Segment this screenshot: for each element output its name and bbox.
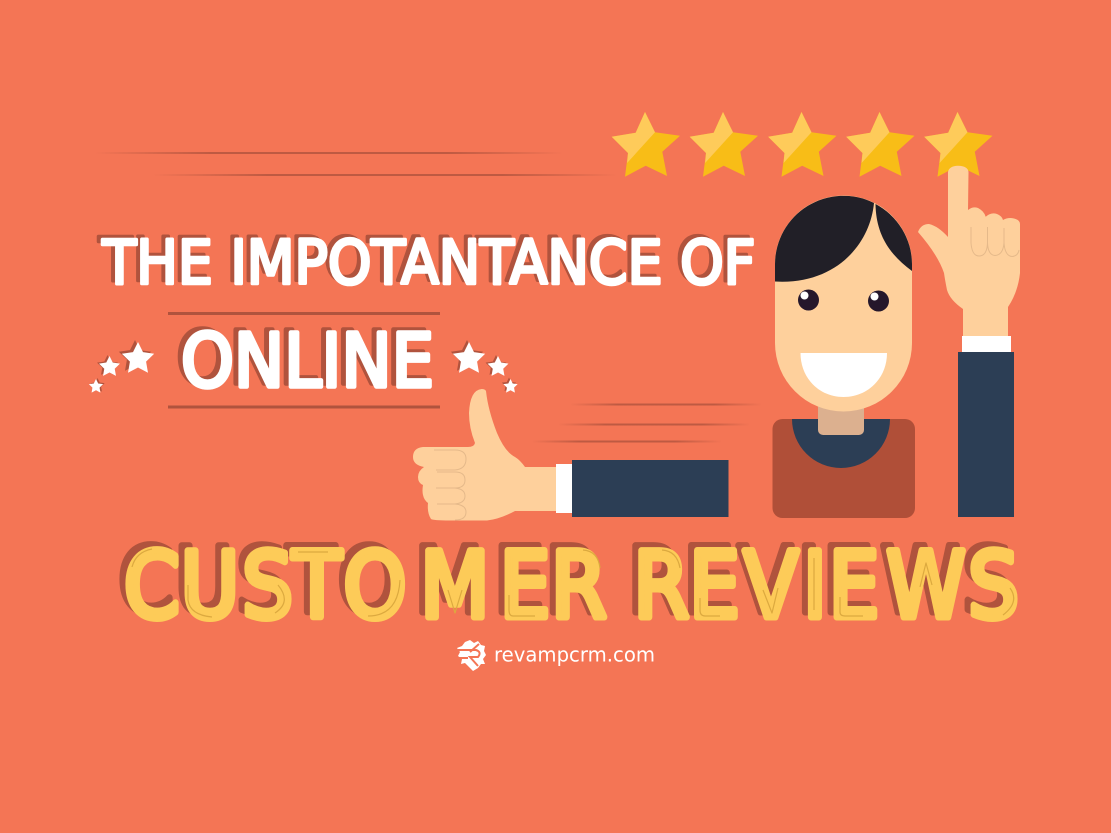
cuff: [962, 336, 1011, 353]
brand logo and url: [457, 640, 655, 671]
star 2: [690, 112, 758, 177]
sleeve: [572, 460, 728, 517]
right eye: [868, 290, 889, 312]
character: head: [775, 196, 912, 412]
cuff: [556, 464, 573, 513]
headline: customer reviews: CUSTOMER REVIEWS: [124, 533, 1019, 639]
hand: [918, 166, 1020, 338]
small stars right: [451, 340, 518, 393]
face: [775, 196, 912, 412]
title line: the impotantance of: THE IMPOTANTANCE OF: [98, 226, 752, 296]
pointing hand and arm: [918, 166, 1020, 517]
finger lines: [971, 227, 1019, 256]
character: torso: [772, 400, 915, 518]
title line: the impotantance of: THE IMPOTANTANCE OF: [102, 228, 756, 298]
title word: online: ONLINE: [181, 318, 434, 404]
collar: [792, 419, 890, 468]
neck: [818, 400, 864, 435]
url text: revampcrm.com: [494, 642, 655, 666]
thumbs up hand and arm: [413, 389, 728, 520]
sleeve: [958, 352, 1014, 517]
rule below online: [168, 406, 440, 408]
star 1: [612, 112, 680, 177]
star 5: [924, 112, 992, 177]
hand-drawn inner accents: [132, 549, 1014, 617]
star 4: [846, 112, 914, 177]
finger lines: [434, 450, 466, 520]
headline: customer reviews: CUSTOMER REVIEWS: [118, 528, 1013, 634]
star 3: [768, 112, 836, 177]
rule above online: [168, 312, 440, 315]
left eye: [798, 290, 819, 310]
smile: [800, 353, 887, 397]
hand: [413, 389, 556, 520]
speed lines: middle: [532, 404, 762, 442]
title word: online: ONLINE: [176, 316, 429, 402]
speed lines: top: [95, 152, 617, 176]
icon: revamp logo: [457, 640, 486, 671]
five star rating: [612, 112, 992, 177]
hair: [775, 196, 912, 282]
small stars left: [89, 340, 154, 393]
